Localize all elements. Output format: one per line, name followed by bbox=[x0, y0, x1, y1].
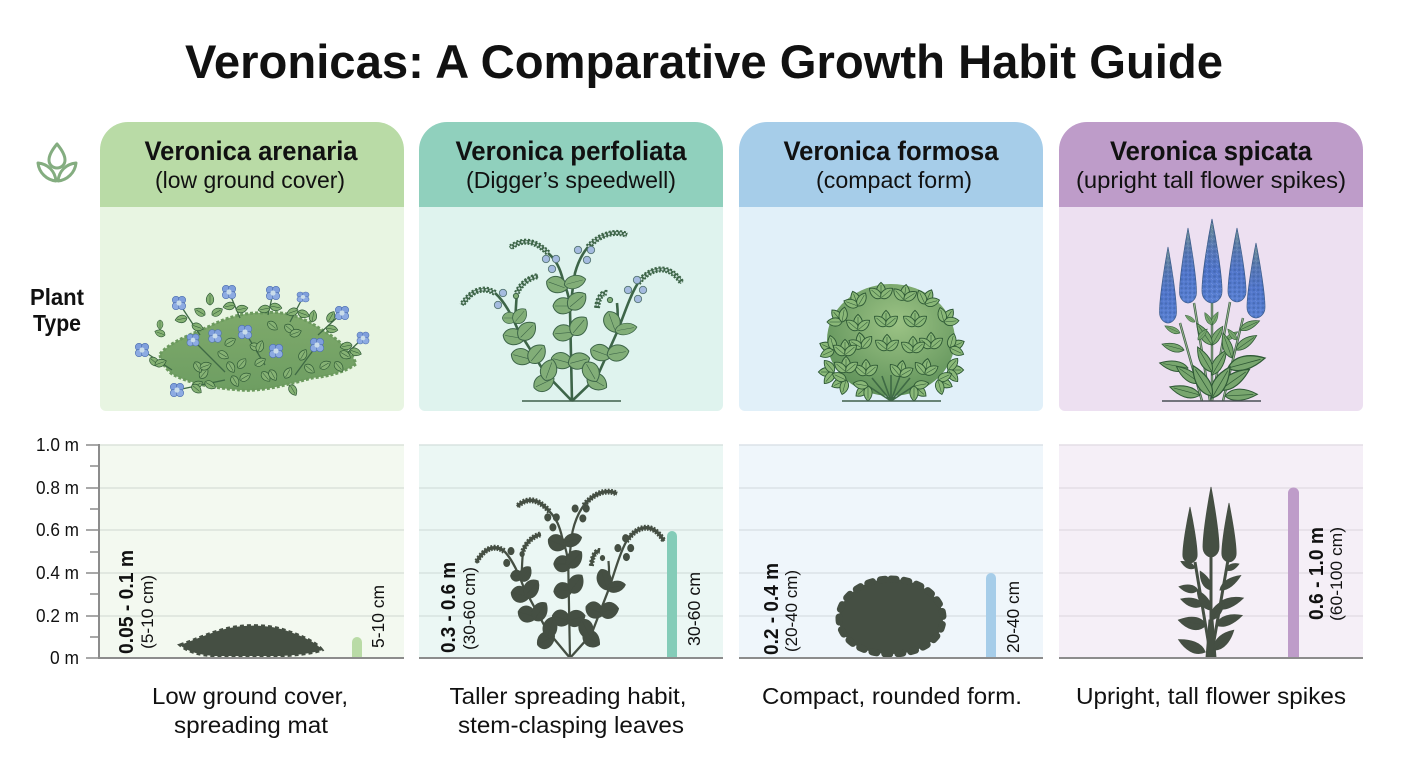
height chart grid bbox=[739, 445, 1043, 616]
panel: veronica arenaria bbox=[100, 122, 404, 738]
height label bbox=[761, 563, 801, 655]
height label: 0.2 - 0.4 m bbox=[761, 563, 783, 655]
height label: (5-10 cm) bbox=[138, 575, 157, 649]
illustration: compact bush bbox=[814, 282, 970, 407]
height chart background bbox=[100, 445, 404, 658]
height label: 0.6 - 1.0 m bbox=[1306, 527, 1328, 620]
species name: Veronica spicata bbox=[1110, 136, 1312, 166]
species name: Veronica perfoliata bbox=[456, 136, 687, 166]
height label bbox=[438, 562, 479, 653]
height bar bbox=[986, 573, 996, 658]
header band bbox=[419, 122, 723, 207]
height label: (20-40 cm) bbox=[782, 570, 801, 652]
row label: plant type: Type bbox=[33, 310, 81, 336]
height axis: 0.2 m bbox=[36, 606, 79, 626]
title: Veronicas: A Comparative Growth Habit Guide bbox=[185, 35, 1223, 88]
height axis bbox=[36, 435, 99, 668]
illustration: ground cover mat bbox=[135, 285, 369, 397]
header band bbox=[1059, 122, 1363, 207]
caption: Compact, rounded form. bbox=[762, 683, 1022, 709]
height label: (30-60 cm) bbox=[460, 567, 479, 650]
illustration: flower spikes bbox=[1159, 219, 1267, 401]
plant silhouette bbox=[839, 579, 943, 654]
illustration background bbox=[419, 207, 723, 411]
height bar bbox=[352, 637, 362, 658]
header band bbox=[100, 122, 404, 207]
plant silhouette bbox=[180, 626, 322, 656]
chart axis baseline bbox=[99, 657, 1363, 659]
panel: veronica perfoliata bbox=[419, 122, 723, 738]
height label bbox=[1306, 527, 1346, 621]
bar label: 20-40 cm bbox=[1003, 581, 1023, 653]
height axis: 0 m bbox=[50, 648, 79, 668]
illustration: spreading stems bbox=[462, 233, 682, 401]
caption: Upright, tall flower spikes bbox=[1076, 683, 1346, 709]
height label: 0.05 - 0.1 m bbox=[116, 550, 138, 654]
height axis: 0.4 m bbox=[36, 563, 79, 583]
plant silhouette bbox=[476, 492, 664, 658]
row label: plant type: Plant bbox=[30, 284, 84, 310]
height label: (60-100 cm) bbox=[1327, 527, 1346, 621]
panel: veronica formosa bbox=[739, 122, 1043, 709]
species name: Veronica arenaria bbox=[144, 136, 358, 166]
header band bbox=[739, 122, 1043, 207]
height chart background bbox=[1059, 445, 1363, 658]
height chart background bbox=[739, 445, 1043, 658]
illustration background bbox=[739, 207, 1043, 411]
height axis: 0.6 m bbox=[36, 520, 79, 540]
height axis: 0.8 m bbox=[36, 478, 79, 498]
species description: (upright tall flower spikes) bbox=[1076, 167, 1346, 193]
panel: veronica spicata bbox=[1059, 122, 1363, 709]
height axis: 1.0 m bbox=[36, 435, 79, 455]
height chart background bbox=[419, 445, 723, 658]
height chart grid bbox=[100, 445, 404, 616]
caption: stem-clasping leaves bbox=[458, 712, 684, 738]
caption bbox=[450, 683, 686, 738]
row label: plant type bbox=[30, 284, 84, 336]
height chart grid bbox=[1059, 445, 1363, 616]
height chart grid bbox=[419, 445, 723, 616]
height label: 0.3 - 0.6 m bbox=[438, 562, 460, 653]
caption: Taller spreading habit, bbox=[450, 683, 686, 709]
bar label: 5-10 cm bbox=[368, 585, 388, 648]
illustration background bbox=[100, 207, 404, 411]
species description: (low ground cover) bbox=[155, 167, 345, 193]
species description: (Digger’s speedwell) bbox=[466, 167, 676, 193]
height bar bbox=[1288, 488, 1299, 658]
plant silhouette bbox=[1177, 487, 1244, 658]
caption bbox=[152, 683, 348, 738]
species name: Veronica formosa bbox=[784, 136, 999, 166]
height label bbox=[116, 550, 157, 654]
icon: sprout bbox=[38, 144, 76, 181]
caption: spreading mat bbox=[174, 712, 329, 738]
caption: Low ground cover, bbox=[152, 683, 348, 709]
illustration background bbox=[1059, 207, 1363, 411]
bar label: 30-60 cm bbox=[684, 572, 704, 646]
species description: (compact form) bbox=[816, 167, 972, 193]
height bar bbox=[667, 531, 677, 658]
